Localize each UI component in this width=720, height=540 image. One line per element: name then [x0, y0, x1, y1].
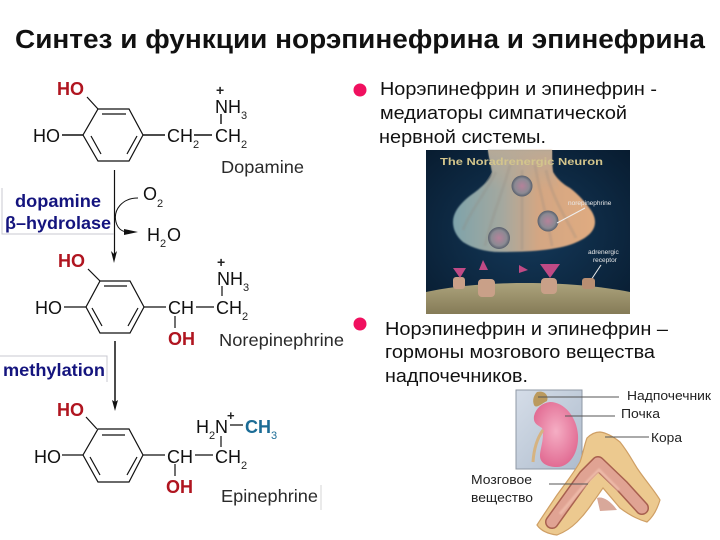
dopamine structure: CH — [215, 126, 241, 146]
label: adrenergic receptor — [588, 249, 619, 280]
epinephrine structure: 2 — [241, 460, 247, 472]
text block: hormones: надпочечников. — [385, 365, 528, 386]
epinephrine structure: CH — [215, 447, 241, 467]
receptors — [453, 260, 595, 297]
oxygen to water reaction arrow: H — [147, 225, 160, 245]
text block: hormones: Норэпинефрин и эпинефрин – — [385, 318, 669, 339]
dopamine structure: HO — [57, 79, 84, 99]
arrow: norepinephrine to epinephrine — [112, 341, 118, 411]
dopamine structure: 2 — [241, 139, 247, 151]
dopamine structure: + — [216, 82, 224, 98]
illustration: adrenal gland: Кора — [651, 430, 683, 445]
label: norepinephrine: norepinephrine — [568, 200, 612, 207]
text block: mediators: нервной системы. — [379, 126, 546, 147]
postsynaptic membrane — [426, 283, 630, 314]
text block: mediators — [379, 78, 657, 147]
enzyme label: methylation: methylation — [3, 360, 105, 380]
epinephrine structure: + — [227, 408, 235, 423]
epinephrine structure: N — [215, 417, 228, 437]
bullet 2 — [354, 318, 366, 330]
epinephrine structure: HO — [34, 447, 61, 467]
text block: mediators: Норэпинефрин и эпинефрин - — [380, 78, 657, 99]
heading in image: The Noradrenergic Neuron — [440, 156, 603, 168]
dopamine structure — [33, 79, 304, 177]
labels: Надпочечник — [627, 388, 711, 403]
enzyme label: dopamine beta-hydrolase: dopamine — [15, 191, 101, 211]
norepinephrine structure: NH — [217, 269, 243, 289]
arrow: dopamine to norepinephrine — [111, 170, 117, 263]
enzyme label: dopamine beta-hydrolase: β–hydrolase — [5, 213, 111, 233]
epinephrine structure: 2 — [209, 430, 215, 442]
norepinephrine structure — [35, 251, 344, 350]
norepinephrine structure: Norepinephrine — [219, 330, 344, 350]
image: noradrenergic neuron — [426, 150, 630, 314]
norepinephrine structure: 3 — [243, 282, 249, 294]
title: Синтез и функции норэпинефрина и эпинефрина — [15, 26, 706, 54]
epinephrine structure: 3 — [271, 430, 277, 442]
epinephrine structure: OH — [166, 477, 193, 497]
norepinephrine structure: CH — [168, 298, 194, 318]
epinephrine structure: Epinephrine — [221, 486, 318, 506]
epinephrine structure — [34, 400, 321, 510]
vesicles — [488, 176, 558, 249]
enzyme label: dopamine beta-hydrolase — [2, 188, 114, 234]
label: adrenergic receptor: adrenergic — [588, 249, 619, 256]
chemical pathway — [0, 79, 344, 510]
illustration: adrenal gland — [471, 388, 711, 535]
oxygen to water reaction arrow: 2 — [160, 238, 166, 250]
norepinephrine structure: HO — [58, 251, 85, 271]
epinephrine structure: H — [196, 417, 209, 437]
bullet 1 — [354, 84, 366, 96]
norepinephrine structure: OH — [168, 329, 195, 349]
dopamine structure: 2 — [193, 139, 199, 151]
text block: mediators: медиаторы симпатической — [380, 102, 627, 123]
oxygen to water reaction arrow: O — [143, 184, 157, 204]
dopamine structure: 3 — [241, 110, 247, 122]
label: norepinephrine — [557, 200, 612, 223]
illustration: adrenal gland: Мозговое — [471, 472, 532, 487]
norepinephrine structure: HO — [35, 298, 62, 318]
dopamine structure: CH — [167, 126, 193, 146]
oxygen to water reaction arrow: 2 — [157, 198, 163, 210]
epinephrine structure: CH — [245, 417, 271, 437]
neuron bulb — [453, 150, 595, 252]
dopamine structure: HO — [33, 126, 60, 146]
illustration: adrenal gland: Почка — [621, 406, 661, 421]
adrenal cross-section — [537, 432, 660, 535]
norepinephrine structure: + — [217, 254, 225, 270]
oxygen to water reaction arrow — [115, 184, 181, 250]
dopamine structure: NH — [215, 97, 241, 117]
norepinephrine structure: 2 — [242, 311, 248, 323]
norepinephrine structure: CH — [216, 298, 242, 318]
text block: hormones — [385, 318, 669, 386]
dopamine structure: Dopamine — [221, 157, 304, 177]
illustration: adrenal gland: вещество — [471, 490, 533, 505]
kidney inset — [516, 390, 582, 469]
text block: hormones: гормоны мозгового вещества — [385, 341, 656, 362]
label: adrenergic receptor: receptor — [593, 257, 618, 264]
epinephrine structure: HO — [57, 400, 84, 420]
oxygen to water reaction arrow: O — [167, 225, 181, 245]
epinephrine structure: CH — [167, 447, 193, 467]
